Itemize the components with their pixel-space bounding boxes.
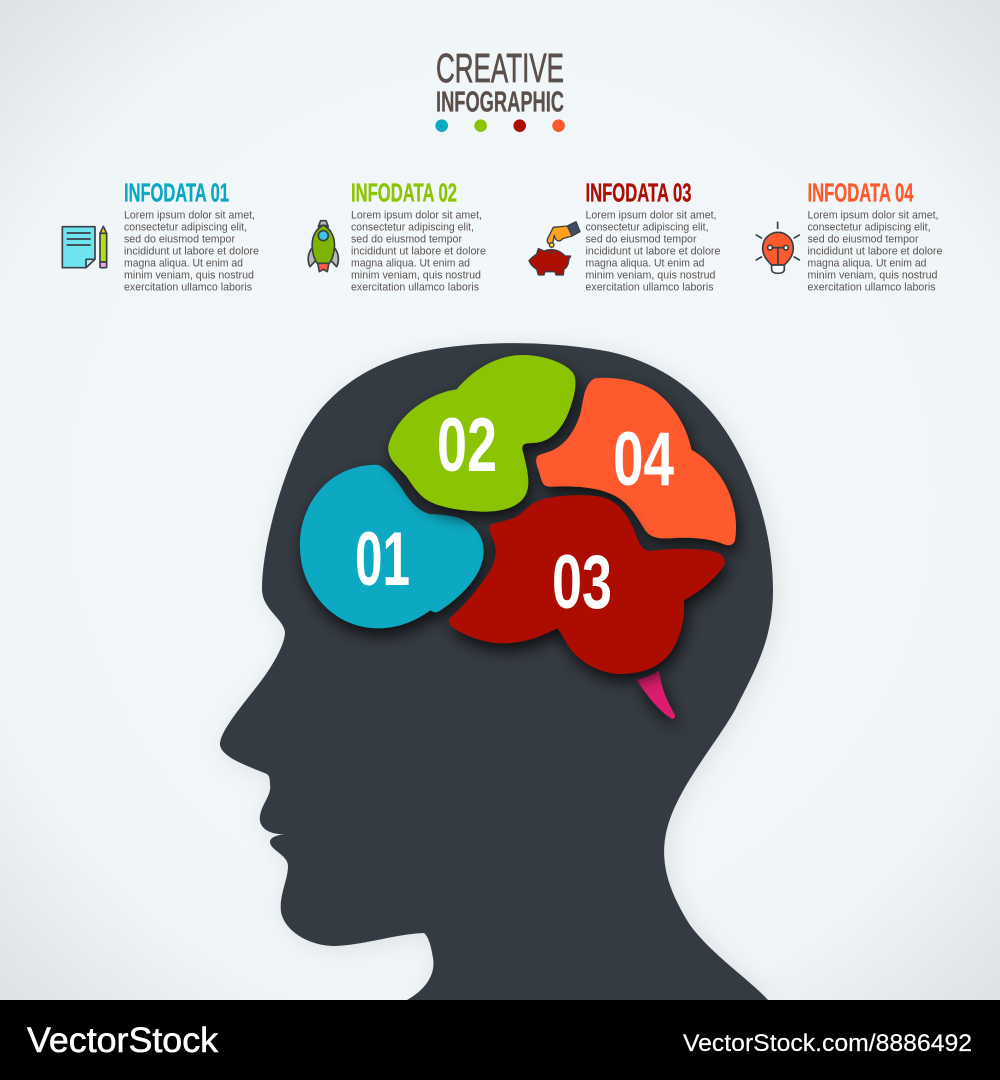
text block: infodata 01: consectetur adipiscing elit,	[124, 222, 247, 234]
text block: infodata 04: incididunt ut labore et dolore	[808, 246, 942, 258]
text block: infodata 03: sed do eiusmod tempor	[586, 234, 697, 246]
text block: infodata 04: minim veniam, quis nostrud	[808, 270, 938, 282]
text block: infodata 04: exercitation ullamco laboris	[808, 282, 936, 294]
panel: infodata 02	[308, 180, 486, 294]
text block: infodata 01: magna aliqua. Ut enim ad	[124, 258, 243, 270]
brain lobe 03: 03	[552, 540, 612, 625]
text block: infodata 04: consectetur adipiscing elit,	[808, 222, 930, 234]
text block: infodata 02: consectetur adipiscing elit,	[351, 222, 474, 234]
text block: infodata 03: consectetur adipiscing elit,	[586, 222, 708, 234]
text block: infodata 02: incididunt ut labore et dolore	[351, 246, 486, 258]
text block: infodata 01: exercitation ullamco laboris	[124, 282, 252, 294]
title	[436, 45, 564, 118]
text block: infodata 03: exercitation ullamco laboris	[586, 282, 714, 294]
icon: hand and piggy bank	[529, 222, 580, 275]
icon: light bulb	[756, 222, 800, 273]
head silhouette	[220, 343, 773, 1000]
icon: note and pencil	[62, 226, 107, 268]
text block: infodata 02: magna aliqua. Ut enim ad	[351, 258, 470, 270]
heading: infodata 02: INFODATA 02	[351, 180, 457, 208]
text block: infodata 03	[586, 210, 720, 294]
footer brand: VectorStock	[27, 1021, 219, 1060]
brain	[300, 355, 736, 719]
panel: infodata 01	[62, 180, 259, 294]
text block: infodata 01: incididunt ut labore et dolore	[124, 246, 259, 258]
panel: infodata 04	[756, 180, 942, 294]
icon: rocket	[308, 221, 338, 272]
heading: infodata 04: INFODATA 04	[808, 180, 914, 208]
brain lobe 02: 02	[437, 403, 497, 488]
heading: infodata 01: INFODATA 01	[124, 180, 229, 208]
brain lobe 01	[300, 465, 484, 628]
title dots	[435, 119, 565, 132]
text block: infodata 01: sed do eiusmod tempor	[124, 234, 235, 246]
panel: infodata 03	[529, 180, 720, 294]
text block: infodata 01	[124, 210, 259, 294]
text block: infodata 02: Lorem ipsum dolor sit amet,	[351, 210, 482, 222]
footer bar	[0, 1000, 1000, 1080]
text block: infodata 01: Lorem ipsum dolor sit amet,	[124, 210, 255, 222]
text block: infodata 03: incididunt ut labore et dolore	[586, 246, 720, 258]
text block: infodata 03: minim veniam, quis nostrud	[586, 270, 716, 282]
title: CREATIVE	[436, 45, 564, 91]
text block: infodata 02	[351, 210, 486, 294]
footer url: VectorStock.com/8886492	[683, 1030, 972, 1057]
brain lobe 02	[388, 355, 575, 512]
text block: infodata 04: magna aliqua. Ut enim ad	[808, 258, 926, 270]
text block: infodata 04	[808, 210, 942, 294]
brain lobe 03	[449, 495, 725, 674]
text block: infodata 04: sed do eiusmod tempor	[808, 234, 919, 246]
text block: infodata 01: minim veniam, quis nostrud	[124, 270, 254, 282]
text block: infodata 04: Lorem ipsum dolor sit amet,	[808, 210, 938, 222]
text block: infodata 03: magna aliqua. Ut enim ad	[586, 258, 704, 270]
text block: infodata 02: exercitation ullamco laboris	[351, 282, 479, 294]
heading: infodata 03: INFODATA 03	[586, 180, 692, 208]
text block: infodata 02: minim veniam, quis nostrud	[351, 270, 481, 282]
title: INFOGRAPHIC	[436, 86, 564, 118]
brain lobe 04: 04	[613, 417, 674, 502]
text block: infodata 02: sed do eiusmod tempor	[351, 234, 462, 246]
brain stem	[637, 671, 675, 719]
text block: infodata 03: Lorem ipsum dolor sit amet,	[586, 210, 716, 222]
brain lobe 04	[536, 378, 736, 545]
brain lobe 01: 01	[355, 517, 410, 602]
